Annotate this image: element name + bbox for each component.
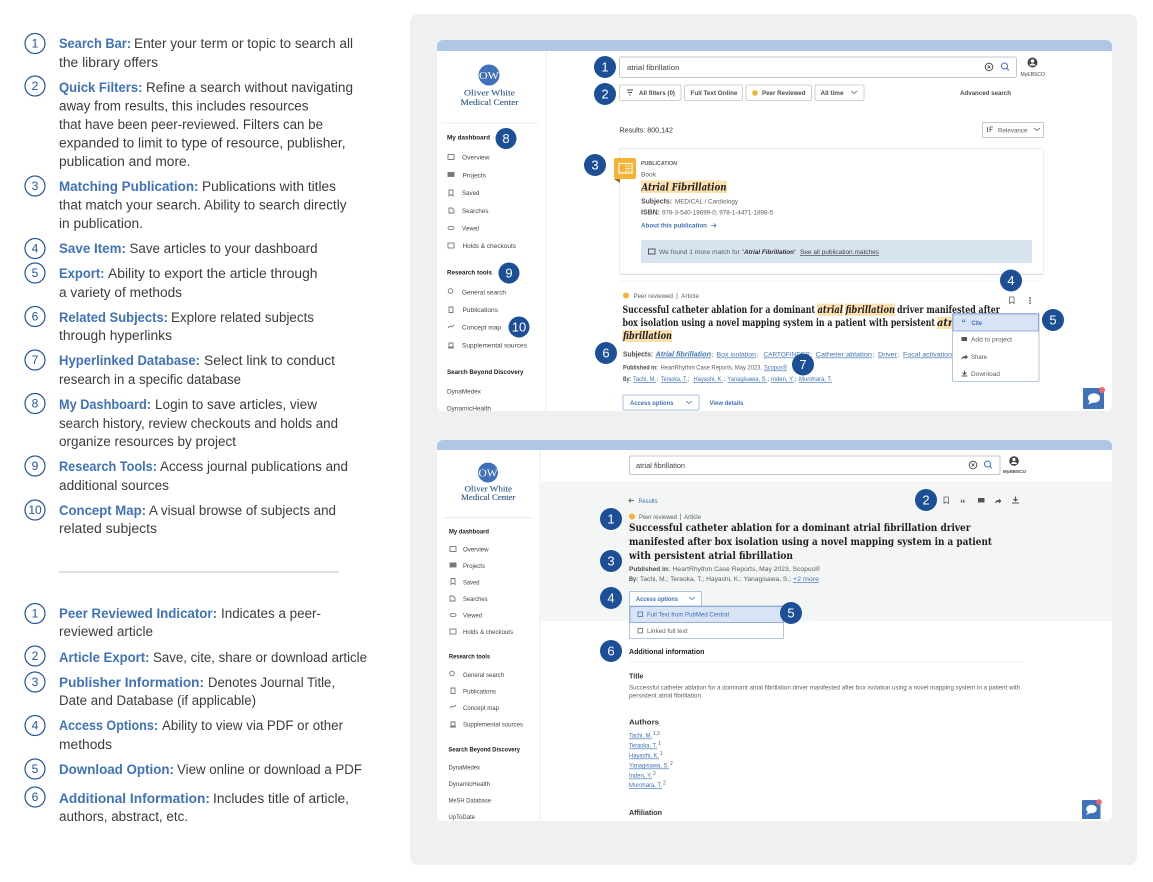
additional information section: persistent atrial fibrillation: [629, 694, 701, 700]
article header: manifested after box isolation using a novel mapping system in a patient: [629, 536, 992, 548]
badge 1: [594, 56, 616, 78]
badge 3: 3: [591, 158, 599, 172]
legend item 9: research tools: 9: [32, 459, 39, 473]
legend item 5: download option: View online or download a PDF: [177, 762, 362, 777]
legend item 8: my dashboard: My Dashboard:: [59, 397, 151, 412]
access options dropdown: Full Text from PubMed Central: [647, 612, 730, 618]
access options dropdown: Access options: [636, 596, 678, 603]
legend item 6: related subjects: Explore related subjects: [171, 310, 314, 325]
badge 6: 6: [602, 346, 610, 360]
legend item 1: search bar: [25, 34, 353, 70]
legend item 2: article export: Article Export:: [59, 650, 150, 665]
search bar: [630, 456, 1026, 475]
additional information section: 2: [663, 780, 666, 786]
badge 7: [792, 354, 814, 376]
legend item 6: additional information: [25, 787, 349, 824]
sidebar navigation: Search Beyond Discovery: [448, 746, 520, 754]
access options dropdown: [630, 592, 784, 638]
additional information section: 1: [658, 741, 661, 747]
export menu: Cite: [972, 320, 982, 327]
sidebar navigation: General search: [462, 290, 506, 296]
legend item 1: search bar: the library offers: [59, 55, 158, 70]
legend item 6: related subjects: through hyperlinks: [59, 328, 172, 343]
results count: Results: 800,142: [620, 128, 673, 134]
legend item 10: concept map: related subjects: [59, 521, 157, 536]
search bar: atrial fibrillation: [627, 65, 680, 72]
legend item 5: export: a variety of methods: [59, 285, 182, 300]
sidebar navigation: Searches: [462, 208, 489, 215]
legend item 7: hyperlinked database: Hyperlinked Database:: [59, 353, 200, 368]
sidebar navigation: Holds & checkouts: [462, 243, 517, 250]
article result: Article: [681, 293, 699, 300]
sidebar navigation: Supplemental sources: [462, 342, 528, 350]
sidebar logo: Medical Center: [460, 97, 519, 107]
sidebar navigation: Concept map: [463, 705, 499, 712]
publication card: Atrial Fibrillation: [641, 182, 726, 194]
legend item 8: my dashboard: search history, review checkouts and holds and: [59, 416, 338, 431]
article result: ;: [688, 376, 690, 383]
sidebar logo: Oliver White: [464, 484, 512, 494]
sidebar logo: Oliver White: [464, 88, 515, 98]
article result: Focal activation: [903, 352, 952, 358]
sidebar navigation: Saved: [463, 580, 480, 586]
badge 10: [508, 316, 530, 338]
legend item 8: my dashboard: [25, 394, 338, 449]
sidebar navigation: Overview: [462, 154, 490, 162]
legend item 9: research tools: Research Tools:: [59, 459, 157, 474]
publication card: PUBLICATION: [641, 161, 677, 167]
sidebar navigation: Projects: [463, 563, 486, 570]
legend item 3: matching publication: 3: [32, 179, 39, 193]
badge 5: [1042, 309, 1064, 331]
legend item 8: my dashboard: 8: [32, 396, 39, 410]
legend item 7: hyperlinked database: 7: [32, 353, 39, 367]
article result: Peer reviewed: [634, 293, 673, 300]
legend item 7: hyperlinked database: Select link to conduct: [204, 353, 335, 368]
badge 1: 1: [601, 60, 609, 74]
relevance sort: Relevance: [998, 128, 1028, 134]
publication card: ": [794, 249, 797, 256]
sidebar navigation: Publications: [463, 688, 497, 696]
legend item 2: article export: [25, 646, 367, 666]
sidebar navigation: My dashboard: [447, 134, 490, 142]
panel: article detail screenshot: [437, 440, 1112, 821]
article result: ;: [656, 376, 658, 383]
sidebar logo: OW: [479, 70, 500, 82]
legend item 6: related subjects: [25, 306, 314, 343]
legend item 2: quick filters: Refine a search without navigating: [146, 80, 353, 95]
publication card: [614, 148, 1044, 274]
article result: ;: [898, 352, 900, 358]
legend item 5: export: Ability to export the article through: [108, 266, 318, 281]
legend item 1: peer reviewed indicator: 1: [32, 606, 39, 620]
badge 6: 6: [607, 644, 615, 658]
badge 9: 9: [505, 266, 513, 280]
article header: Successful catheter ablation for a dominant atrial fibrillation driver: [629, 522, 971, 534]
article header: Peer reviewed: [639, 514, 677, 521]
badge 5: [780, 602, 802, 624]
legend item 4: access options: Ability to view via PDF or other: [162, 718, 343, 733]
export menu: Download: [971, 371, 1000, 378]
badge 7: 7: [799, 357, 807, 372]
search bar: MyEBSCO: [1003, 469, 1026, 475]
publication card: See all publication matches: [800, 249, 880, 256]
badge 10: 10: [512, 320, 526, 334]
legend item 4: access options: methods: [59, 737, 112, 752]
legend item 3: publisher information: Date and Database (if applicable): [59, 693, 256, 708]
legend item 2: quick filters: away from results, this includes resources: [59, 98, 309, 114]
legend item 1: search bar: 1: [32, 36, 39, 50]
sidebar icons: [448, 154, 454, 348]
legend item 6: related subjects: 6: [32, 310, 39, 324]
legend item 6: additional information: authors, abstract, etc.: [59, 809, 188, 824]
sidebar navigation: UpToDate: [448, 814, 475, 821]
legend item 2: quick filters: [25, 76, 353, 169]
legend item 9: research tools: additional sources: [59, 478, 169, 493]
sidebar navigation: Viewed: [462, 226, 479, 232]
additional information section: [629, 649, 1024, 817]
additional information section: Authors: [629, 720, 659, 726]
legend item 5: export: 5: [32, 266, 39, 280]
back to results link: [629, 498, 658, 505]
article result: Tachi, M.: [633, 376, 656, 383]
legend item 10: concept map: [25, 500, 336, 536]
article result: ;: [810, 352, 812, 358]
sidebar navigation: DynamicHealth: [447, 406, 491, 412]
legend item 2: article export: Save, cite, share or download article: [153, 650, 367, 665]
article header: with persistent atrial fibrillation: [628, 550, 793, 562]
badge 5: 5: [1049, 312, 1057, 328]
sidebar navigation: Concept map: [462, 324, 501, 332]
legend item 9: research tools: [25, 456, 348, 493]
legend item 5: download option: 5: [32, 762, 39, 776]
sidebar navigation: Search Beyond Discovery: [447, 369, 524, 376]
article result: Murohara, T.: [799, 376, 832, 383]
export menu: [952, 314, 1039, 382]
badge 8: [496, 128, 516, 149]
export menu: “: [962, 318, 966, 328]
legend item 4: access options: Access Options:: [59, 718, 158, 733]
legend item 5: download option: Download Option:: [59, 762, 174, 777]
sidebar navigation: Supplemental sources: [463, 722, 524, 728]
badge 6: [600, 640, 622, 662]
additional information section: Yanagisawa, S.: [629, 762, 669, 770]
legend item 2: article export: 2: [32, 649, 39, 663]
sidebar navigation: Overview: [463, 546, 489, 554]
sidebar logo: [461, 462, 516, 502]
legend item 3: matching publication: that match your search. Ability to search directly: [59, 198, 347, 212]
legend item 4: save item: [25, 238, 318, 258]
article result: Driver: [878, 352, 898, 358]
article result: Teraoka, T.: [661, 376, 687, 383]
icon: publication tab: [614, 158, 636, 183]
badge 1: 1: [607, 512, 615, 526]
article result: Catheter ablation: [816, 352, 872, 358]
badge 2: [915, 489, 937, 511]
quick filter buttons: Full Text Online: [690, 90, 738, 97]
callout badges: [496, 56, 1064, 376]
additional information section: Inden, Y.: [629, 772, 652, 780]
additional information section: Hayashi, K.: [629, 752, 659, 760]
quick filter buttons: [620, 85, 1011, 100]
legend item 3: matching publication: Publications with titles: [202, 179, 336, 194]
badge 2: 2: [601, 86, 609, 102]
article result: [622, 292, 1031, 410]
legend item 2: quick filters: publication and more.: [59, 154, 190, 169]
legend item 1: peer reviewed indicator: Peer Reviewed Indicator:: [59, 606, 217, 621]
article result: Yanagisawa, S.: [728, 376, 767, 383]
article result: ;: [756, 352, 758, 358]
legend item 10: concept map: A visual browse of subjects and: [149, 503, 336, 518]
additional information section: 2: [653, 771, 656, 777]
article result: Published in:: [623, 364, 658, 372]
badge 4: [600, 587, 622, 609]
sidebar navigation: DynamicHealth: [448, 781, 490, 788]
article header: Published in:: [629, 566, 670, 573]
article result: Successful catheter ablation for a dominant: [622, 305, 815, 316]
legend item 5: export: [25, 263, 318, 300]
badge 1: [600, 508, 622, 530]
publication card: MEDICAL / Cardiology: [675, 198, 739, 206]
icon: chat button: [1083, 387, 1105, 409]
sidebar navigation: Searches: [463, 596, 488, 603]
legend item 3: matching publication: [25, 176, 347, 231]
legend item 4: save item: Save articles to your dashboard: [130, 241, 318, 256]
badge 8: 8: [502, 131, 510, 146]
legend: article detail page: [25, 604, 367, 824]
publication card: About this publication: [641, 222, 707, 230]
article result: ;: [768, 376, 770, 383]
sidebar navigation: Publications: [462, 307, 499, 314]
article header: Article: [684, 514, 701, 521]
panel: search results screenshot: [437, 40, 1112, 412]
legend item 3: matching publication: in publication.: [59, 216, 143, 231]
legend item 10: concept map: 10: [28, 503, 42, 517]
search bar: MyEBSCO: [1020, 72, 1045, 78]
sidebar logo: Medical Center: [461, 492, 516, 502]
article result: fibrillation: [622, 331, 672, 342]
article result: CARTOFINDER: [764, 352, 810, 358]
article header: [628, 514, 992, 583]
legend item 9: research tools: Access journal publications and: [160, 459, 348, 474]
quick filter buttons: All time: [820, 90, 844, 97]
legend item 1: peer reviewed indicator: [25, 604, 321, 639]
legend: search results page: [25, 34, 353, 536]
additional information section: Murohara, T.: [629, 782, 662, 789]
article result: View details: [710, 400, 744, 407]
quick filter buttons: All filters (0): [639, 90, 675, 97]
additional information section: Title: [629, 674, 644, 680]
badge 2: 2: [922, 492, 930, 508]
sidebar navigation: Research tools: [449, 654, 490, 660]
legend item 1: search bar: Search Bar:: [59, 36, 131, 51]
badge 4: 4: [1007, 273, 1015, 288]
quick filter buttons: Advanced search: [960, 90, 1011, 97]
additional information section: Successful catheter ablation for a dominant atrial fibrillation driver manifested after box isolation using a novel mapping system in a patient with: [629, 686, 1020, 692]
additional information section: Affiliation: [629, 810, 662, 817]
sidebar icons: [450, 546, 456, 727]
article result: HeartRhythm Case Reports, May 2023,: [660, 364, 762, 372]
additional information section: 1,2: [653, 731, 660, 737]
article result: Subjects:: [623, 352, 653, 358]
badge 5: 5: [787, 606, 795, 620]
article result: Hayashi, K.: [694, 376, 723, 383]
additional information section: 1: [660, 751, 663, 757]
legend item 6: additional information: 6: [32, 790, 39, 804]
article header: +2 more: [793, 576, 819, 583]
callout badges: [600, 489, 937, 662]
article result: Box isolation: [716, 352, 756, 358]
article result: fibrillation: [845, 305, 895, 316]
legend item 4: save item: 4: [32, 242, 39, 256]
article result: Inden, Y.: [771, 376, 794, 383]
article result: atrial: [818, 305, 843, 316]
article export icons: “: [960, 498, 966, 510]
export menu: Add to project: [971, 336, 1012, 344]
sidebar navigation: MeSH Database: [448, 798, 491, 804]
access options dropdown: Linked full text: [647, 628, 688, 635]
sidebar navigation: DynaMedex: [447, 388, 482, 396]
legend item 7: hyperlinked database: [25, 350, 335, 387]
back to results link: Results: [638, 498, 658, 505]
additional information section: Additional information: [629, 649, 704, 656]
legend item 10: concept map: Concept Map:: [59, 503, 146, 518]
legend item 3: matching publication: Matching Publication:: [59, 179, 198, 194]
sidebar navigation: My dashboard: [449, 528, 489, 536]
legend item 2: quick filters: expanded to limit to type of resource, publisher,: [59, 136, 346, 150]
sidebar navigation: Projects: [462, 172, 487, 180]
publication card: 978-3-540-19699-0; 978-1-4471-1898-5: [662, 210, 773, 216]
article result: box isolation using a novel mapping system in a patient with persistent: [622, 318, 935, 329]
legend item 2: quick filters: that have been peer-reviewed. Filters can be: [59, 117, 323, 132]
article result: Access options: [630, 400, 674, 407]
legend item 5: export: Export:: [59, 266, 104, 281]
legend item 6: additional information: Includes title of article,: [213, 791, 349, 806]
publication card: We found 1 more match for ": [659, 249, 745, 256]
badge 3: [600, 550, 622, 572]
sidebar navigation: Holds & checkouts: [463, 629, 514, 636]
badge 4: 4: [607, 590, 615, 606]
legend item 3: publisher information: Publisher Information:: [59, 675, 204, 690]
legend item 4: access options: [25, 716, 343, 752]
article result: atr: [937, 318, 954, 329]
legend item 8: my dashboard: Login to save articles, view: [155, 397, 317, 412]
badge 3: [584, 154, 606, 176]
quick filter buttons: Peer Reviewed: [762, 90, 806, 97]
article result: ;: [794, 376, 796, 383]
legend item 4: save item: Save Item:: [59, 241, 126, 256]
sidebar logo: OW: [478, 468, 498, 480]
sidebar navigation: Saved: [462, 190, 480, 197]
legend item 5: download option: [25, 759, 362, 779]
legend item 2: quick filters: Quick Filters:: [59, 80, 142, 95]
article result: By:: [623, 376, 631, 383]
article result: ;: [872, 352, 874, 358]
article result: Atrial fibrillation: [654, 352, 711, 358]
legend item 4: access options: 4: [32, 718, 39, 732]
sidebar logo: [460, 64, 519, 107]
badge 6: [595, 342, 617, 364]
legend item 2: quick filters: 2: [32, 79, 39, 93]
article result: ;: [724, 376, 726, 383]
article header: HeartRhythm Case Reports, May 2023, Scopus®: [672, 565, 820, 573]
additional information section: Tachi, M.: [629, 732, 652, 740]
legend item 6: related subjects: Related Subjects:: [59, 310, 168, 325]
search bar: atrial fibrillation: [636, 463, 685, 470]
article export icons: [944, 496, 1019, 510]
legend item 3: publisher information: Denotes Journal Title,: [208, 675, 335, 690]
article result: Scopus®: [764, 364, 787, 372]
legend item 6: additional information: Additional Information:: [59, 791, 210, 806]
search bar: [620, 57, 1045, 78]
additional information section: Teraoka, T.: [629, 742, 657, 750]
legend item 1: search bar: Enter your term or topic to search all: [134, 36, 353, 51]
legend item 7: hyperlinked database: research in a specific database: [59, 372, 241, 387]
badge 4: [1000, 270, 1022, 292]
sidebar navigation: [447, 134, 528, 412]
publication card: Book: [641, 172, 657, 178]
legend item 1: peer reviewed indicator: reviewed article: [59, 624, 153, 639]
article result: ;: [712, 352, 714, 358]
sidebar navigation: Research tools: [447, 270, 492, 276]
publication card: Subjects:: [641, 198, 672, 206]
article header: Tachi, M.; Teraoka, T.; Hayashi, K.; Yanagisawa, S.;: [640, 576, 791, 583]
badge 2: [594, 83, 616, 105]
legend item 8: my dashboard: organize resources by project: [59, 434, 236, 449]
panel: screenshots background: [410, 14, 1137, 865]
legend item 3: publisher information: [25, 672, 335, 708]
publication card: ISBN:: [641, 210, 660, 216]
sidebar navigation: DynaMedex: [448, 764, 481, 772]
export menu: Share: [971, 354, 987, 361]
sidebar navigation: General search: [463, 672, 504, 679]
legend item 1: peer reviewed indicator: Indicates a peer-: [221, 606, 321, 621]
additional information section: 2: [670, 761, 673, 767]
badge 3: 3: [607, 554, 615, 568]
legend item 3: publisher information: 3: [32, 675, 39, 689]
icon: chat button: [1082, 799, 1102, 819]
relevance sort: [982, 122, 1044, 138]
badge 9: [498, 262, 520, 284]
article header: By:: [629, 576, 638, 583]
sidebar navigation: [448, 528, 524, 821]
publication card: Atrial Fibrillation: [743, 249, 794, 256]
sidebar navigation: Viewed: [463, 612, 482, 620]
article result: driver manifested after: [897, 305, 1001, 316]
